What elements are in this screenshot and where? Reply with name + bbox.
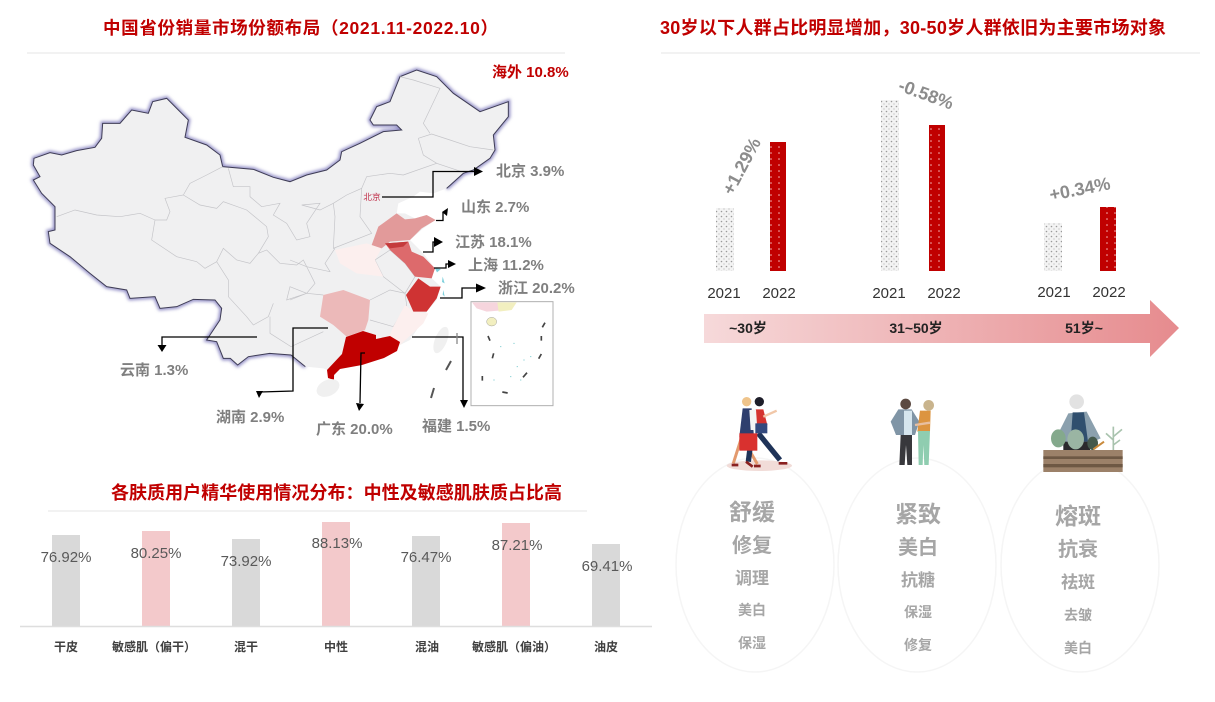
- bar chart: age groups: +0.34%: [1048, 173, 1112, 205]
- label: Yunnan: 云南 1.3%: [120, 362, 188, 379]
- oval: senior: [1001, 458, 1159, 672]
- bar chart: age groups: 2021: [872, 285, 906, 302]
- bar chart: age groups: 2021: [707, 285, 741, 302]
- bar chart: skin type: [20, 522, 652, 654]
- label: Jiangsu: 江苏 18.1%: [455, 234, 532, 251]
- label: Zhejiang: 浙江 20.2%: [498, 279, 575, 297]
- bar chart: skin type: 干皮: [54, 639, 78, 654]
- bar chart: skin type: 敏感肌（偏油）: [472, 639, 556, 654]
- oval: middle age: [838, 458, 996, 672]
- oval: middle age: 抗糖: [901, 570, 935, 590]
- label: Fujian: 福建 1.5%: [422, 417, 490, 435]
- province: Zhejiang: [406, 278, 441, 312]
- arrow: age axis: 31~50岁: [889, 320, 943, 336]
- bar chart: skin type: 混干: [234, 639, 258, 654]
- bar chart: age groups: +1.29%: [718, 134, 765, 198]
- oval: senior: 美白: [1064, 640, 1092, 656]
- bar chart: skin type: 69.41%: [582, 558, 632, 575]
- province: Henan: [335, 243, 383, 277]
- Beijing marker: 北京: [363, 191, 381, 202]
- oval: youth: 保湿: [738, 635, 766, 651]
- oval: youth: 舒缓: [729, 499, 775, 525]
- oval: middle age: 保湿: [904, 604, 932, 620]
- oval: youth: 美白: [738, 602, 766, 618]
- label: Shandong: 山东 2.7%: [461, 198, 529, 216]
- bar chart: skin type: 87.21%: [492, 537, 542, 554]
- arrow: age axis: 51岁~: [1065, 320, 1103, 336]
- title: age groups: 30岁以下人群占比明显增加，30-50岁人群依旧为主要市场对象: [660, 17, 1166, 38]
- oval: youth: 调理: [735, 569, 769, 588]
- illustration: young women walking: [727, 397, 792, 471]
- province: Guangdong: [327, 331, 400, 380]
- illustration: senior gardening: [1043, 394, 1123, 472]
- oval: senior: 抗衰: [1058, 537, 1098, 561]
- leader lines with arrowheads: [158, 167, 486, 411]
- oval: senior: 祛斑: [1061, 572, 1095, 592]
- oval: senior: 熔斑: [1055, 503, 1101, 529]
- arrow: age axis: [704, 300, 1179, 357]
- title: province share: 中国省份销量市场份额布局（2021.11-2022.10）: [103, 18, 498, 38]
- bar chart: skin type: 油皮: [594, 639, 618, 654]
- province: Jiangsu: [385, 242, 435, 278]
- oval: senior: 去皱: [1064, 607, 1092, 623]
- bar chart: age groups: 2022: [1092, 284, 1126, 301]
- title: skin type: 各肤质用户精华使用情况分布：中性及敏感肌肤质占比高: [111, 482, 562, 503]
- bar chart: skin type: 80.25%: [131, 545, 181, 562]
- bar chart: skin type: 88.13%: [312, 535, 362, 552]
- bar chart: age groups: 2021: [1037, 284, 1071, 301]
- bar chart: skin type: 混油: [415, 639, 439, 654]
- label: Shanghai: 上海 11.2%: [468, 256, 544, 274]
- bar chart: age groups: -0.58%: [896, 75, 956, 114]
- bar chart: age groups: [707, 75, 1126, 302]
- map of China: [33, 70, 553, 406]
- province: Shandong: [372, 213, 436, 248]
- bar chart: age groups: 2022: [762, 285, 796, 302]
- oval: middle age: 修复: [904, 637, 932, 653]
- label: Beijing: 北京 3.9%: [496, 162, 564, 180]
- oval: middle age: 美白: [898, 536, 938, 559]
- bar chart: age groups: 2022: [927, 285, 961, 302]
- bar chart: skin type: 敏感肌（偏干）: [112, 639, 196, 654]
- illustration: middle-aged couple: [891, 399, 934, 465]
- bar chart: skin type: 76.92%: [41, 549, 91, 566]
- oval: youth: 修复: [732, 534, 772, 557]
- province: Hunan: [320, 290, 370, 337]
- oval: youth: [676, 458, 834, 672]
- island: Hainan: [314, 376, 342, 400]
- bar chart: skin type: 73.92%: [221, 553, 271, 570]
- label: Hunan: 湖南 2.9%: [216, 409, 284, 426]
- island: Taiwan: [430, 325, 452, 355]
- label: overseas: 海外 10.8%: [492, 63, 569, 81]
- bar chart: skin type: 76.47%: [401, 549, 451, 566]
- arrow: age axis: ~30岁: [729, 320, 767, 336]
- oval: middle age: 紧致: [895, 501, 941, 527]
- label: Guangdong: 广东 20.0%: [316, 420, 393, 438]
- dash lines: [431, 361, 451, 398]
- inset map of South China Sea: [471, 302, 553, 406]
- bar chart: skin type: 中性: [324, 639, 348, 654]
- province: Fujian: [388, 305, 428, 345]
